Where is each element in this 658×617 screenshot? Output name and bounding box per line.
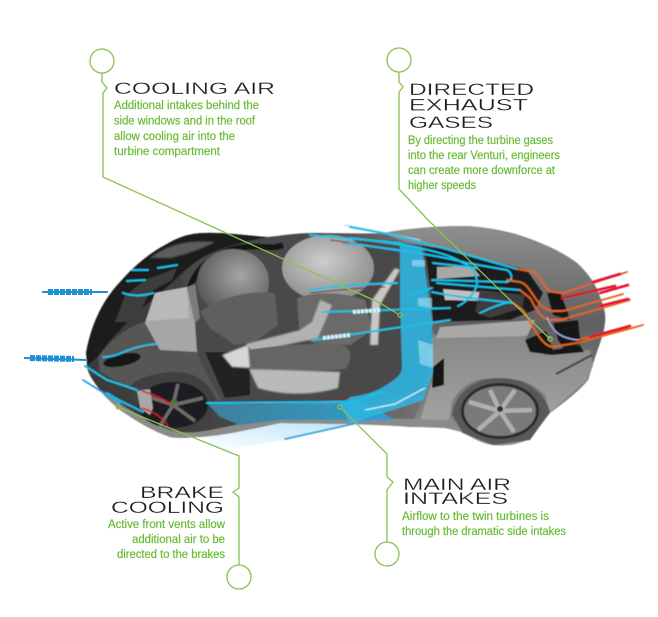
car body (86, 226, 605, 445)
seat shell left (197, 249, 269, 315)
seat base (247, 344, 350, 371)
rear tail accent (556, 355, 592, 374)
rear fender (420, 326, 593, 425)
light blue airflow glow under car (205, 412, 384, 451)
blue side intake duct (340, 242, 433, 423)
body text (108, 519, 226, 561)
dark red body shadows (110, 240, 385, 404)
callout: main air intakes (338, 405, 566, 566)
body text: Additional intakes behind the (114, 100, 259, 112)
leader line (116, 405, 251, 589)
heading (403, 475, 511, 508)
seat shell right (282, 235, 374, 301)
body text: into the rear Venturi, engineers (408, 150, 560, 162)
body text: Airflow to the twin turbines is (402, 511, 549, 523)
car (83, 225, 643, 451)
lower sill (102, 392, 462, 438)
body text (408, 135, 560, 192)
blue inlet arrow bottom (24, 358, 86, 360)
rear wheel (452, 378, 550, 445)
body text: side windows and in the roof (114, 116, 256, 128)
turbine cylinder upper (437, 266, 480, 279)
console (246, 300, 332, 352)
hood vent panel (115, 268, 177, 322)
cabin arch (187, 245, 283, 305)
heading: BRAKE (140, 483, 224, 502)
leader line (338, 405, 399, 566)
front dark roof edge (86, 233, 267, 365)
rear cabin bulkhead detail (370, 268, 400, 345)
heading: INTAKES (403, 489, 508, 508)
engine bay grey block (475, 290, 525, 318)
side slot (432, 358, 444, 388)
blue to pink transition (547, 317, 578, 340)
cabin floor shadow (205, 352, 250, 398)
exhaust red arrows (562, 274, 630, 337)
intake highlights (365, 388, 425, 410)
brake caliper (137, 389, 153, 415)
body text: directed to the brakes (117, 549, 225, 561)
heading: EXHAUST (409, 96, 528, 114)
body text: can create more downforce at (408, 165, 556, 177)
front airflow lines (85, 235, 450, 412)
cabin interior (180, 238, 433, 402)
seat cushion right (297, 293, 372, 345)
heading: COOLING AIR (114, 79, 275, 98)
front wheel (128, 372, 218, 432)
body text (114, 100, 259, 158)
body text: through the dramatic side intakes (402, 526, 566, 538)
body text: By directing the turbine gases (408, 135, 553, 147)
body text: additional air to be (132, 534, 225, 546)
engine airflow lines (350, 227, 520, 313)
callout: brake cooling (108, 405, 251, 589)
rear bodywork (383, 226, 605, 445)
vent front (102, 350, 142, 370)
silver panel under engine (436, 320, 535, 338)
body text: turbine compartment (114, 146, 221, 158)
hood highlight (150, 241, 215, 258)
body text: Active front vents allow (108, 519, 226, 531)
console white trim (222, 345, 250, 368)
body text: higher speeds (408, 180, 476, 192)
exhaust lines orange (507, 269, 643, 347)
turbine cylinder lower (443, 289, 484, 301)
body text (402, 511, 566, 538)
silver sill (249, 369, 340, 394)
seat cushion left (200, 292, 278, 345)
heading: DIRECTED (409, 80, 534, 99)
heading (409, 80, 534, 132)
front fender (98, 322, 222, 402)
engine bay (387, 240, 543, 322)
blue inlet arrow top (42, 291, 108, 293)
leader line (90, 49, 402, 317)
heading: GASES (409, 113, 493, 132)
callout: cooling air (90, 49, 402, 317)
rear vents (525, 292, 586, 355)
pale blue side streams (83, 225, 420, 439)
white jagged arrows (323, 310, 380, 338)
blue lower intake shadow (207, 400, 395, 425)
radiator (145, 284, 200, 352)
leader line (387, 48, 552, 341)
duct inner panels (412, 260, 433, 368)
heading: COOLING (111, 498, 224, 517)
body text: allow cooling air into the (114, 131, 235, 143)
callout: directed exhaust gases (387, 48, 560, 341)
heading: MAIN AIR (403, 475, 511, 494)
red brake ducts (142, 391, 173, 426)
heading (111, 483, 224, 517)
